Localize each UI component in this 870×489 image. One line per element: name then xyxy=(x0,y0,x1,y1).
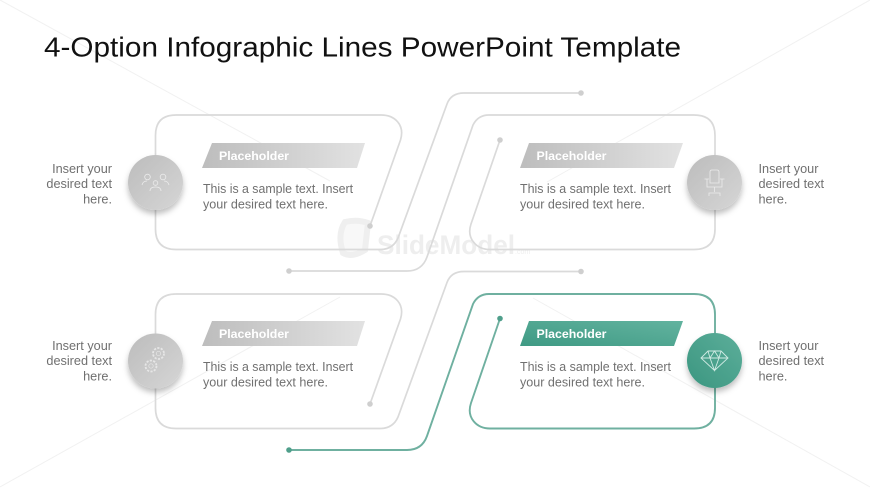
side label: here. xyxy=(758,370,787,384)
heading banner xyxy=(202,143,365,168)
icon: people xyxy=(128,155,183,210)
endpoint dot xyxy=(578,90,584,96)
connector line: bottom right xyxy=(289,294,715,450)
body text: This is a sample text. Insert xyxy=(203,182,353,196)
body text: your desired text here. xyxy=(520,376,645,390)
connector line: top right xyxy=(289,115,715,271)
title: 4-Option Infographic Lines PowerPoint Template xyxy=(44,30,681,62)
endpoint dot xyxy=(367,223,373,229)
endpoint dot xyxy=(286,268,292,274)
side label: desired text xyxy=(758,177,825,191)
body text: your desired text here. xyxy=(203,376,328,390)
side label: here. xyxy=(758,192,787,206)
panel: top right option xyxy=(286,115,825,274)
endpoint dot xyxy=(367,401,373,407)
panel: bottom left option xyxy=(46,269,584,428)
watermark: .com xyxy=(515,249,530,256)
heading text: Placeholder xyxy=(536,149,607,163)
side label: desired text xyxy=(46,354,112,368)
side label: here. xyxy=(83,192,112,206)
endpoint dot xyxy=(286,447,292,453)
side label: Insert your xyxy=(52,339,113,353)
side label: Insert your xyxy=(758,162,819,176)
heading text: Placeholder xyxy=(536,327,607,341)
body text: your desired text here. xyxy=(520,198,645,212)
heading text: Placeholder xyxy=(219,149,289,163)
heading banner xyxy=(520,321,683,346)
side label: here. xyxy=(83,370,112,384)
body text: your desired text here. xyxy=(203,198,328,212)
connector line: bottom left xyxy=(156,272,581,428)
heading banner xyxy=(202,321,365,346)
panel: top left option xyxy=(46,90,584,250)
watermark xyxy=(340,221,530,260)
icon: diamond xyxy=(687,333,742,388)
endpoint dot xyxy=(497,137,503,143)
endpoint dot xyxy=(497,316,503,321)
heading banner xyxy=(520,143,683,168)
side label: Insert your xyxy=(52,162,113,176)
panel: bottom right highlighted option xyxy=(286,294,825,453)
endpoint dot xyxy=(578,269,584,274)
body text: This is a sample text. Insert xyxy=(520,360,671,374)
icon: office chair xyxy=(687,155,742,210)
watermark: SlideModel xyxy=(377,230,515,260)
icon: gears xyxy=(128,334,183,388)
side label: desired text xyxy=(46,177,112,191)
side label: Insert your xyxy=(758,339,819,353)
heading text: Placeholder xyxy=(219,327,289,341)
body text: This is a sample text. Insert xyxy=(203,360,353,374)
connector line: top left xyxy=(156,93,581,250)
side label: desired text xyxy=(758,354,825,368)
body text: This is a sample text. Insert xyxy=(520,182,671,196)
